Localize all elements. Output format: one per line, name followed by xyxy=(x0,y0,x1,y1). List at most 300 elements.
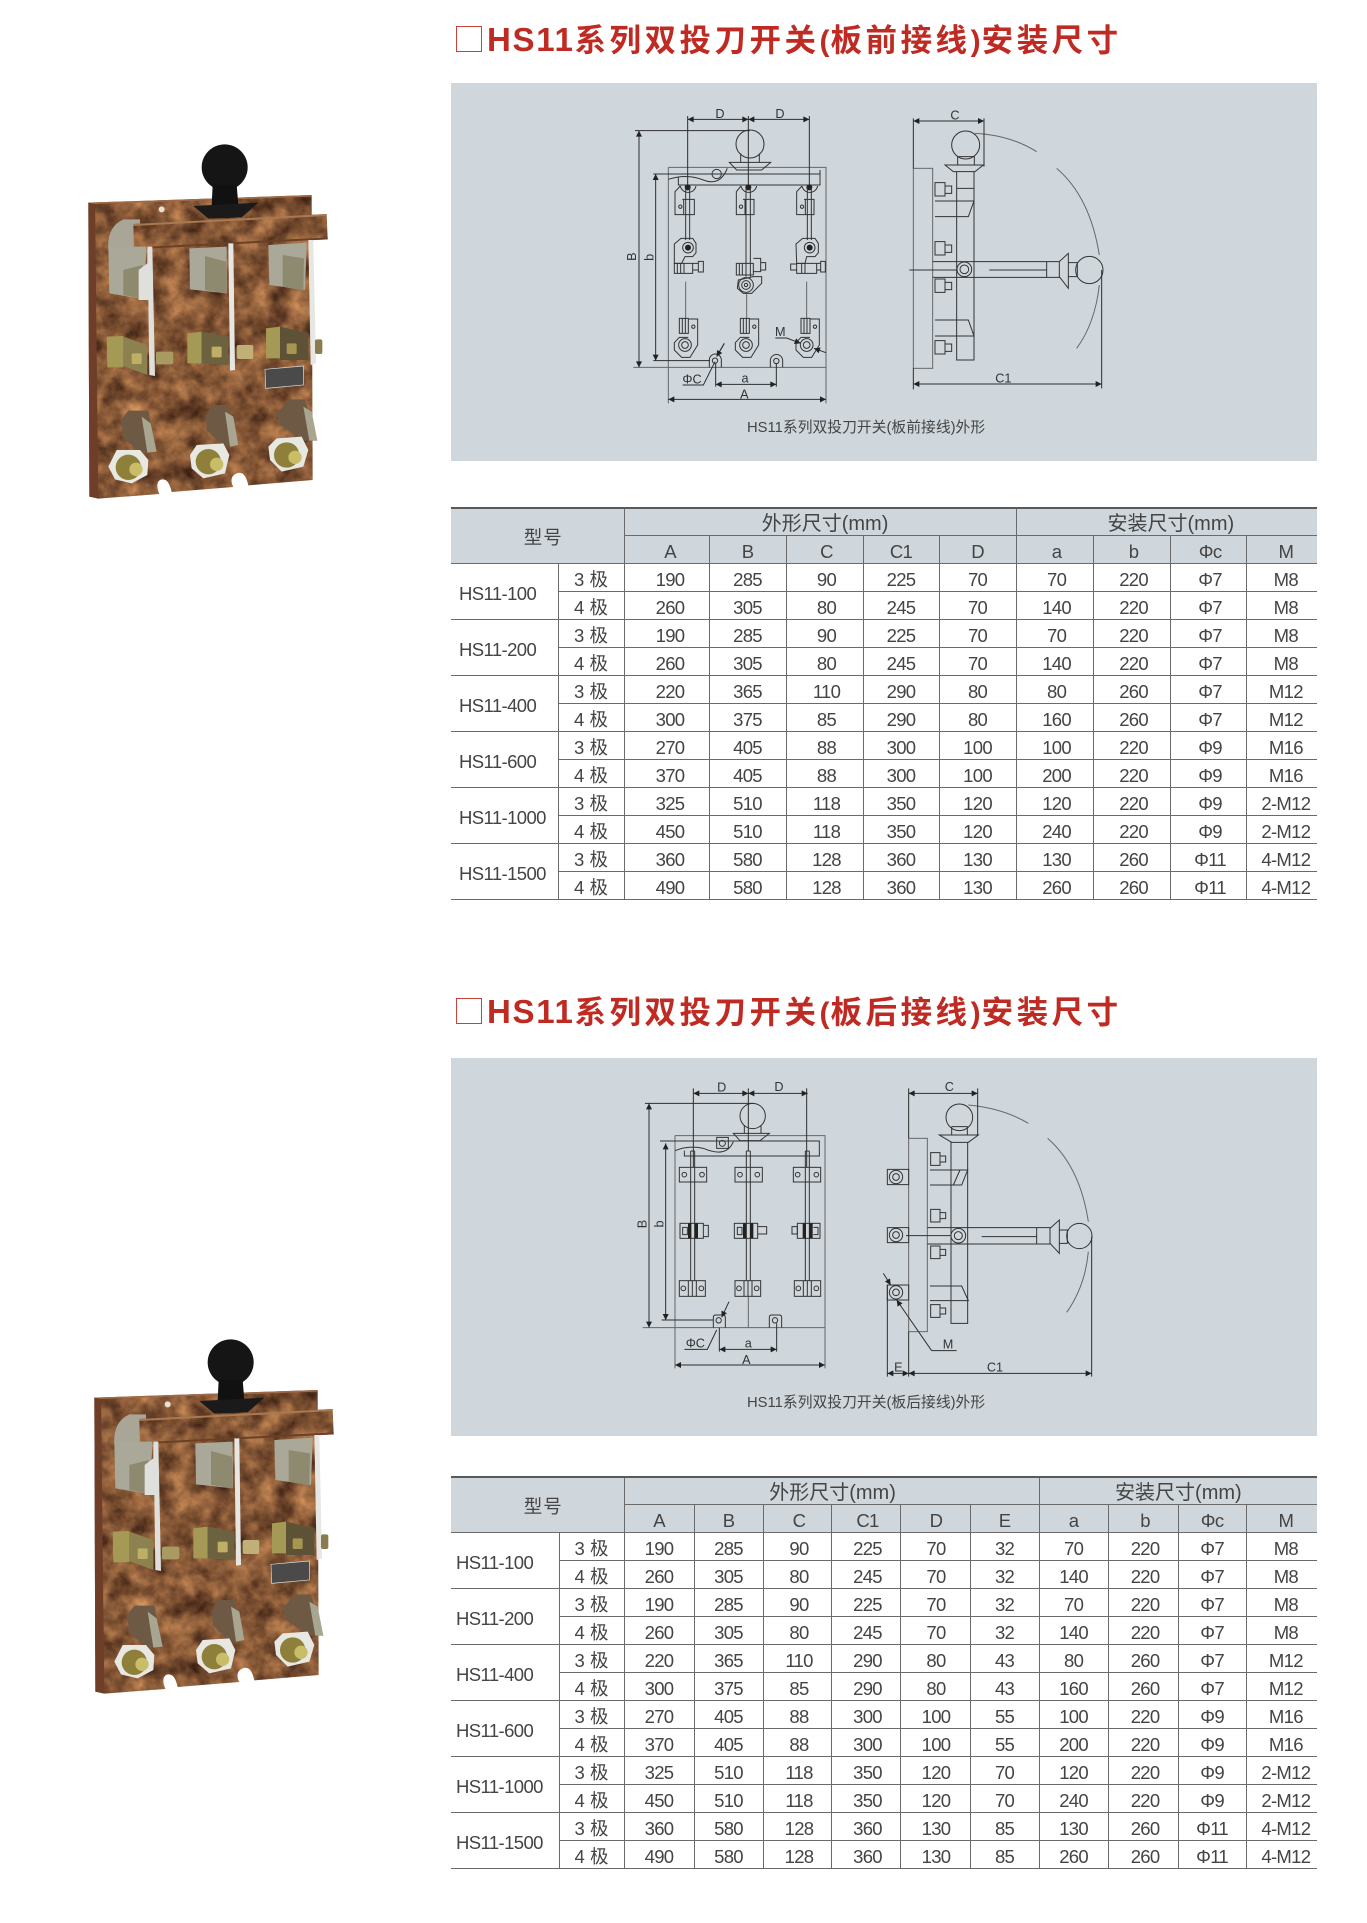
caption: HS11系列双投刀开关(板后接线)外形 xyxy=(747,1395,985,1411)
table: front-connected dimensions: 110 xyxy=(813,680,840,702)
table: rear-connected dimensions: 130 xyxy=(1059,1818,1088,1838)
drawing: front and side views: D xyxy=(717,1081,726,1095)
table: front-connected dimensions: 375 xyxy=(733,708,762,730)
table: rear-connected dimensions: 100 xyxy=(922,1734,950,1754)
table: front-connected dimensions: 3 极 xyxy=(574,624,608,646)
table: front-connected dimensions: M8 xyxy=(1274,568,1298,590)
table: rear-connected dimensions: 80 xyxy=(789,1566,809,1586)
table: rear-connected dimensions: 3 极 xyxy=(575,1594,608,1614)
table: rear-connected dimensions: 120 xyxy=(922,1790,950,1810)
table: front-connected dimensions: Φ11 xyxy=(1194,876,1226,898)
table: rear-connected dimensions: 4 极 xyxy=(575,1846,608,1866)
table: rear-connected dimensions: 2-M12 xyxy=(1261,1790,1310,1810)
table: front-connected dimensions: 305 xyxy=(733,596,762,618)
table: rear-connected dimensions: 128 xyxy=(785,1846,813,1866)
table: front-connected dimensions: 300 xyxy=(887,764,915,786)
table: rear-connected dimensions: Φ7 xyxy=(1200,1678,1224,1698)
side dimensions xyxy=(913,118,1102,389)
table: rear-connected dimensions: Φ7 xyxy=(1200,1594,1224,1614)
table: front-connected dimensions: 安装尺寸(mm) xyxy=(1108,513,1234,535)
table: front-connected dimensions: 2-M12 xyxy=(1261,792,1310,814)
table: front-connected dimensions: 220 xyxy=(1119,596,1148,618)
table: rear-connected dimensions: 55 xyxy=(995,1734,1014,1754)
table: front-connected dimensions: 70 xyxy=(968,568,987,590)
table: rear-connected dimensions: Φ9 xyxy=(1200,1790,1224,1810)
table: front-connected dimensions: 300 xyxy=(656,708,684,730)
table: front-connected dimensions: D xyxy=(971,540,984,562)
table: rear-connected dimensions: M8 xyxy=(1274,1594,1298,1614)
table: front-connected dimensions: 260 xyxy=(1119,680,1148,702)
table: front-connected dimensions: 350 xyxy=(887,792,915,814)
lower contacts xyxy=(674,318,819,357)
lower contacts xyxy=(679,1281,821,1296)
table: front-connected dimensions xyxy=(451,507,1317,900)
knife connecting lines xyxy=(686,282,807,318)
table: front-connected dimensions: 70 xyxy=(968,624,987,646)
table: front-connected dimensions: 300 xyxy=(887,736,915,758)
middle contacts xyxy=(674,238,825,293)
table: rear-connected dimensions: 260 xyxy=(1131,1650,1159,1670)
table: rear-connected dimensions: 580 xyxy=(714,1818,743,1838)
table: rear-connected dimensions: 365 xyxy=(714,1650,743,1670)
heading: rear-connected section: HS11系列双投刀开关(板后接线)安装尺寸 xyxy=(487,993,1122,1030)
table: front-connected dimensions: 405 xyxy=(733,736,762,758)
table: rear-connected dimensions: 3 极 xyxy=(575,1762,608,1782)
table: rear-connected dimensions: 88 xyxy=(789,1734,809,1754)
table: rear-connected dimensions: 70 xyxy=(1064,1538,1083,1558)
table: front-connected dimensions: 4 极 xyxy=(574,876,608,898)
table: rear-connected dimensions: 118 xyxy=(785,1762,813,1782)
table: front-connected dimensions: 4 极 xyxy=(574,596,608,618)
table: rear-connected dimensions: 220 xyxy=(1131,1622,1159,1642)
table: front-connected dimensions: 88 xyxy=(817,736,836,758)
table: rear-connected dimensions: 80 xyxy=(789,1622,809,1642)
table: front-connected dimensions: 240 xyxy=(1042,820,1071,842)
table: front-connected dimensions: Φ7 xyxy=(1198,596,1222,618)
table: front-connected dimensions: 270 xyxy=(656,736,684,758)
table: rear-connected dimensions: 70 xyxy=(926,1538,946,1558)
table: front-connected dimensions: 220 xyxy=(1119,736,1148,758)
table: front-connected dimensions: 85 xyxy=(817,708,836,730)
table: front-connected dimensions: 220 xyxy=(656,680,684,702)
table: rear-connected dimensions: 100 xyxy=(922,1706,950,1726)
table: rear-connected dimensions: M8 xyxy=(1274,1622,1298,1642)
middle contact black bands xyxy=(688,1223,813,1238)
table: rear-connected dimensions: 220 xyxy=(1131,1594,1159,1614)
table: rear-connected dimensions: 260 xyxy=(1059,1846,1088,1866)
table: front-connected dimensions: 118 xyxy=(813,792,840,814)
table: rear-connected dimensions: 118 xyxy=(785,1790,813,1810)
table: rear-connected dimensions: 375 xyxy=(714,1678,743,1698)
table: front-connected dimensions: 70 xyxy=(968,652,987,674)
upper contacts xyxy=(679,1167,821,1182)
table: front-connected dimensions: 350 xyxy=(887,820,915,842)
drawing: front and side views: C1 xyxy=(995,372,1011,386)
table: front-connected dimensions: C xyxy=(820,540,833,562)
table: front-connected dimensions: 160 xyxy=(1042,708,1071,730)
table: rear-connected dimensions: 360 xyxy=(645,1818,673,1838)
table: rear-connected dimensions: M xyxy=(1278,1510,1293,1530)
table: front-connected dimensions: 190 xyxy=(656,568,684,590)
table: front-connected dimensions: 140 xyxy=(1042,652,1071,674)
table: front-connected dimensions: 405 xyxy=(733,764,762,786)
table: rear-connected dimensions: 490 xyxy=(645,1846,673,1866)
table: rear-connected dimensions: 260 xyxy=(645,1566,673,1586)
table: front-connected dimensions: 100 xyxy=(1042,736,1071,758)
table: rear-connected dimensions: 100 xyxy=(1059,1706,1088,1726)
table: rear-connected dimensions: E xyxy=(999,1510,1010,1530)
table: rear-connected dimensions: Φ7 xyxy=(1200,1566,1224,1586)
table: front-connected dimensions: Φ7 xyxy=(1198,568,1222,590)
table: front-connected dimensions: 260 xyxy=(656,596,684,618)
table: rear-connected dimensions: 3 极 xyxy=(575,1538,608,1558)
table: rear-connected dimensions: A xyxy=(653,1510,665,1530)
table: rear-connected dimensions: Φ7 xyxy=(1200,1650,1224,1670)
table: rear-connected dimensions: Φ9 xyxy=(1200,1762,1224,1782)
table: front-connected dimensions: 200 xyxy=(1042,764,1071,786)
table: front-connected dimensions: 290 xyxy=(887,680,915,702)
table: front-connected dimensions: Φ7 xyxy=(1198,624,1222,646)
table: rear-connected dimensions: 325 xyxy=(645,1762,673,1782)
side view xyxy=(909,1138,927,1332)
table: front-connected dimensions: 220 xyxy=(1119,568,1148,590)
side view xyxy=(913,168,933,368)
table: rear-connected dimensions: 80 xyxy=(926,1650,946,1670)
table: front-connected dimensions: 510 xyxy=(733,820,762,842)
drawing: front and side views: ΦC xyxy=(682,372,702,386)
table: front-connected dimensions: 90 xyxy=(817,568,836,590)
table: front-connected dimensions: 88 xyxy=(817,764,836,786)
table: front-connected dimensions: Φ9 xyxy=(1198,736,1222,758)
table: rear-connected dimensions: B xyxy=(723,1510,734,1530)
table: rear-connected dimensions: 4 极 xyxy=(575,1790,608,1810)
plate outline xyxy=(633,167,826,403)
table: rear-connected dimensions: 220 xyxy=(1131,1706,1159,1726)
table: rear-connected dimensions: M8 xyxy=(1274,1538,1298,1558)
table: rear-connected dimensions: 290 xyxy=(853,1650,882,1670)
table: front-connected dimensions: 型号 xyxy=(524,527,563,548)
table: front-connected dimensions: a xyxy=(1052,540,1061,562)
table: front-connected dimensions: 365 xyxy=(733,680,762,702)
table: rear-connected dimensions: 245 xyxy=(853,1622,882,1642)
table: rear-connected dimensions: a xyxy=(1069,1510,1078,1530)
table: front-connected dimensions: 220 xyxy=(1119,764,1148,786)
table: rear-connected dimensions: 3 极 xyxy=(575,1650,608,1670)
table: rear-connected dimensions: 245 xyxy=(853,1566,882,1586)
table: rear-connected dimensions: 305 xyxy=(714,1622,743,1642)
panel: rear-connected outline diagram xyxy=(451,1058,1317,1436)
table: front-connected dimensions: 360 xyxy=(887,876,915,898)
table: rear-connected dimensions: 70 xyxy=(1064,1594,1083,1614)
table: front-connected dimensions: 260 xyxy=(1119,848,1148,870)
table: rear-connected dimensions: M12 xyxy=(1269,1650,1303,1670)
side dimensions xyxy=(887,1088,1092,1377)
table: front-connected dimensions: 130 xyxy=(1042,848,1071,870)
table: front-connected dimensions: M16 xyxy=(1269,736,1303,758)
table: rear-connected dimensions: 285 xyxy=(714,1538,743,1558)
table: rear-connected dimensions: 70 xyxy=(995,1790,1014,1810)
table: front-connected dimensions: HS11-400 xyxy=(459,694,536,716)
table: front-connected dimensions: 80 xyxy=(817,596,836,618)
table: rear-connected dimensions: 270 xyxy=(645,1706,673,1726)
table: front-connected dimensions: Φ7 xyxy=(1198,652,1222,674)
table: rear-connected dimensions: 140 xyxy=(1059,1566,1088,1586)
table: rear-connected dimensions: 130 xyxy=(922,1818,950,1838)
plate outline xyxy=(643,1136,825,1368)
table: front-connected dimensions: B xyxy=(742,540,753,562)
table: rear-connected dimensions: 130 xyxy=(922,1846,950,1866)
table: rear-connected dimensions: 305 xyxy=(714,1566,743,1586)
table: front-connected dimensions: 3 极 xyxy=(574,736,608,758)
table: front-connected dimensions: 130 xyxy=(963,876,992,898)
table: rear-connected dimensions: 260 xyxy=(1131,1846,1159,1866)
table: rear-connected dimensions: 85 xyxy=(995,1846,1014,1866)
table: rear-connected dimensions: 405 xyxy=(714,1734,743,1754)
drawing: front and side views: b xyxy=(653,1220,667,1228)
table: front-connected dimensions: Φ9 xyxy=(1198,820,1222,842)
drawing: front and side views: M xyxy=(943,1338,953,1352)
table: front-connected dimensions: Φ7 xyxy=(1198,680,1222,702)
table: front-connected dimensions: A xyxy=(664,540,676,562)
table: rear-connected dimensions: 3 极 xyxy=(575,1706,608,1726)
table: front-connected dimensions: 260 xyxy=(1119,708,1148,730)
photo: double-throw knife switch, front-connected xyxy=(88,144,328,499)
table: front-connected dimensions: 80 xyxy=(1047,680,1066,702)
table: rear-connected dimensions: 43 xyxy=(995,1650,1014,1670)
table: front-connected dimensions: 140 xyxy=(1042,596,1071,618)
table: rear-connected dimensions: 300 xyxy=(853,1706,882,1726)
table: front-connected dimensions: 120 xyxy=(1042,792,1071,814)
table: front-connected dimensions: 3 极 xyxy=(574,848,608,870)
drawing: front and side views: a xyxy=(741,372,749,386)
table: rear-connected dimensions: 220 xyxy=(1131,1762,1159,1782)
table: front-connected dimensions: 260 xyxy=(1119,876,1148,898)
table: rear-connected dimensions: 220 xyxy=(1131,1538,1159,1558)
table: rear-connected dimensions: 120 xyxy=(1059,1762,1088,1782)
table: rear-connected dimensions: 外形尺寸(mm) xyxy=(769,1482,896,1504)
table: front-connected dimensions: 120 xyxy=(963,792,992,814)
table: rear-connected dimensions: 405 xyxy=(714,1706,743,1726)
table: front-connected dimensions: 3 极 xyxy=(574,568,608,590)
table: rear-connected dimensions: 290 xyxy=(853,1678,882,1698)
table: front-connected dimensions: 285 xyxy=(733,624,762,646)
table: front-connected dimensions: 外形尺寸(mm) xyxy=(762,513,888,535)
table: front-connected dimensions: 225 xyxy=(887,568,915,590)
drawing: front and side views: b xyxy=(643,254,657,261)
lower dimensions xyxy=(684,1323,777,1352)
table: rear-connected dimensions: 300 xyxy=(853,1734,882,1754)
drawing: front and side views: M xyxy=(775,325,786,339)
table: rear-connected dimensions: 190 xyxy=(645,1538,673,1558)
caption: HS11系列双投刀开关(板前接线)外形 xyxy=(747,420,985,436)
table: rear-connected dimensions: Φ7 xyxy=(1200,1538,1224,1558)
table: front-connected dimensions: 260 xyxy=(1042,876,1071,898)
table: front-connected dimensions: HS11-1000 xyxy=(459,806,546,828)
table: front-connected dimensions: 510 xyxy=(733,792,762,814)
table: rear-connected dimensions: Φ11 xyxy=(1196,1846,1228,1866)
table: front-connected dimensions: 90 xyxy=(817,624,836,646)
table: front-connected dimensions: M12 xyxy=(1269,708,1303,730)
table: front-connected dimensions: 120 xyxy=(963,820,992,842)
heading: front-connected section: HS11系列双投刀开关(板前接线)安装尺寸 xyxy=(487,21,1122,58)
table: front-connected dimensions: Φ11 xyxy=(1194,848,1226,870)
table: rear-connected dimensions: 220 xyxy=(645,1650,673,1670)
drawing: front and side views: D xyxy=(715,107,725,121)
table: rear-connected dimensions: 32 xyxy=(995,1622,1014,1642)
table: rear-connected dimensions: 220 xyxy=(1131,1566,1159,1586)
table: front-connected dimensions: 70 xyxy=(1047,624,1066,646)
table: rear-connected dimensions: M16 xyxy=(1269,1706,1303,1726)
table: rear-connected dimensions: C1 xyxy=(856,1510,879,1530)
table: front-connected dimensions: 4 极 xyxy=(574,764,608,786)
table: rear-connected dimensions: 350 xyxy=(853,1790,882,1810)
table: front-connected dimensions: 80 xyxy=(968,708,987,730)
table: rear-connected dimensions: M12 xyxy=(1269,1678,1303,1698)
table: rear-connected dimensions: HS11-400 xyxy=(456,1664,533,1684)
table: rear-connected dimensions: 110 xyxy=(785,1650,813,1670)
table: front-connected dimensions: 220 xyxy=(1119,792,1148,814)
table: rear-connected dimensions: 285 xyxy=(714,1594,743,1614)
table: rear-connected dimensions: HS11-200 xyxy=(456,1608,533,1628)
table: rear-connected dimensions: 360 xyxy=(853,1846,882,1866)
table: rear-connected dimensions: 80 xyxy=(926,1678,946,1698)
photo: double-throw knife switch, rear-connected xyxy=(94,1339,334,1694)
table: rear-connected dimensions: 90 xyxy=(789,1538,809,1558)
table: rear-connected dimensions: 85 xyxy=(995,1818,1014,1838)
table: front-connected dimensions: Φc xyxy=(1199,540,1221,562)
table: front-connected dimensions: 370 xyxy=(656,764,684,786)
table: front-connected dimensions: 130 xyxy=(963,848,992,870)
table: rear-connected dimensions: HS11-1500 xyxy=(456,1832,543,1852)
middle contacts xyxy=(680,1223,820,1238)
drawing: front and side views: A xyxy=(740,388,749,402)
table: rear-connected dimensions: 55 xyxy=(995,1706,1014,1726)
table: rear-connected dimensions: 80 xyxy=(1064,1650,1083,1670)
table: rear-connected dimensions: C xyxy=(793,1510,805,1530)
table: rear-connected dimensions xyxy=(451,1476,1317,1869)
table: rear-connected dimensions: Φ9 xyxy=(1200,1706,1224,1726)
table: rear-connected dimensions: Φ7 xyxy=(1200,1622,1224,1642)
table: front-connected dimensions: 80 xyxy=(817,652,836,674)
table: rear-connected dimensions: 240 xyxy=(1059,1790,1088,1810)
table: rear-connected dimensions: 90 xyxy=(789,1594,809,1614)
table: rear-connected dimensions: M8 xyxy=(1274,1566,1298,1586)
table: front-connected dimensions: M8 xyxy=(1274,652,1298,674)
table: front-connected dimensions: 580 xyxy=(733,876,762,898)
table: rear-connected dimensions: 140 xyxy=(1059,1622,1088,1642)
handle xyxy=(740,1103,765,1129)
table: rear-connected dimensions: 128 xyxy=(785,1818,813,1838)
table: rear-connected dimensions: HS11-1000 xyxy=(456,1776,543,1796)
table: front-connected dimensions: 260 xyxy=(656,652,684,674)
table: front-connected dimensions: 70 xyxy=(1047,568,1066,590)
table: rear-connected dimensions: 4-M12 xyxy=(1261,1818,1310,1838)
table: rear-connected dimensions: 300 xyxy=(645,1678,673,1698)
drawing: front and side views: B xyxy=(625,252,639,261)
drawing: front and side views: B xyxy=(636,1220,650,1228)
front dimensions xyxy=(645,1088,807,1320)
table: front-connected dimensions: HS11-1500 xyxy=(459,862,546,884)
table: front-connected dimensions: b xyxy=(1129,540,1138,562)
table: front-connected dimensions: Φ7 xyxy=(1198,708,1222,730)
table: front-connected dimensions: 225 xyxy=(887,624,915,646)
table: rear-connected dimensions: b xyxy=(1140,1510,1150,1530)
handle xyxy=(736,130,764,158)
table: front-connected dimensions: 450 xyxy=(656,820,684,842)
table: front-connected dimensions: Φ9 xyxy=(1198,764,1222,786)
table: front-connected dimensions: 70 xyxy=(968,596,987,618)
table: rear-connected dimensions: 4-M12 xyxy=(1261,1846,1310,1866)
table: rear-connected dimensions: 4 极 xyxy=(575,1622,608,1642)
table: front-connected dimensions: C1 xyxy=(890,540,912,562)
drawing: front and side views: D xyxy=(774,1080,784,1094)
drawing: front and side views xyxy=(625,107,1104,404)
drawing: front and side views: E xyxy=(894,1361,903,1375)
table: rear-connected dimensions: 260 xyxy=(645,1622,673,1642)
table: rear-connected dimensions: 3 极 xyxy=(575,1818,608,1838)
table: front-connected dimensions: Φ9 xyxy=(1198,792,1222,814)
table: front-connected dimensions: M8 xyxy=(1274,624,1298,646)
table: front-connected dimensions: HS11-100 xyxy=(459,582,536,604)
table: front-connected dimensions: 4 极 xyxy=(574,652,608,674)
table: rear-connected dimensions: 350 xyxy=(853,1762,882,1782)
table: front-connected dimensions: M12 xyxy=(1269,680,1303,702)
table: rear-connected dimensions: 225 xyxy=(853,1538,882,1558)
table: rear-connected dimensions: 220 xyxy=(1131,1790,1159,1810)
table: rear-connected dimensions: 70 xyxy=(995,1762,1014,1782)
table: rear-connected dimensions: 70 xyxy=(926,1622,946,1642)
table: front-connected dimensions: M16 xyxy=(1269,764,1303,786)
table: rear-connected dimensions: HS11-600 xyxy=(456,1720,533,1740)
table: front-connected dimensions: 325 xyxy=(656,792,684,814)
table: rear-connected dimensions: 260 xyxy=(1131,1678,1159,1698)
table: front-connected dimensions: 245 xyxy=(887,652,915,674)
drawing: front and side views: A xyxy=(742,1353,751,1367)
table: rear-connected dimensions: 2-M12 xyxy=(1261,1762,1310,1782)
table: front-connected dimensions: 100 xyxy=(963,736,992,758)
table: front-connected dimensions: HS11-600 xyxy=(459,750,536,772)
table: front-connected dimensions: 3 极 xyxy=(574,680,608,702)
table: rear-connected dimensions: 70 xyxy=(926,1594,946,1614)
upper contacts xyxy=(675,184,818,277)
table: rear-connected dimensions: Φ9 xyxy=(1200,1734,1224,1754)
table: front-connected dimensions: 2-M12 xyxy=(1261,820,1310,842)
table: front-connected dimensions: 4-M12 xyxy=(1261,876,1310,898)
table: front-connected dimensions: 290 xyxy=(887,708,915,730)
knife rods xyxy=(691,1151,809,1281)
table: front-connected dimensions: 128 xyxy=(812,848,841,870)
table: rear-connected dimensions: 32 xyxy=(995,1538,1014,1558)
drawing: front and side views xyxy=(636,1080,1092,1377)
table: front-connected dimensions: 100 xyxy=(963,764,992,786)
table: front-connected dimensions: 3 极 xyxy=(574,792,608,814)
table: rear-connected dimensions: 120 xyxy=(922,1762,950,1782)
table: rear-connected dimensions: 510 xyxy=(714,1790,743,1810)
table: front-connected dimensions: 4-M12 xyxy=(1261,848,1310,870)
table: rear-connected dimensions: 32 xyxy=(995,1566,1014,1586)
table: rear-connected dimensions: 260 xyxy=(1131,1818,1159,1838)
table: rear-connected dimensions: 360 xyxy=(853,1818,882,1838)
table: rear-connected dimensions: Φc xyxy=(1201,1510,1223,1530)
table: rear-connected dimensions: D xyxy=(930,1510,942,1530)
table: front-connected dimensions: 245 xyxy=(887,596,915,618)
table: front-connected dimensions: 118 xyxy=(813,820,840,842)
table: rear-connected dimensions: 220 xyxy=(1131,1734,1159,1754)
table: front-connected dimensions: M8 xyxy=(1274,596,1298,618)
table: rear-connected dimensions: Φ11 xyxy=(1196,1818,1228,1838)
table: rear-connected dimensions: 450 xyxy=(645,1790,673,1810)
table: front-connected dimensions: 580 xyxy=(733,848,762,870)
